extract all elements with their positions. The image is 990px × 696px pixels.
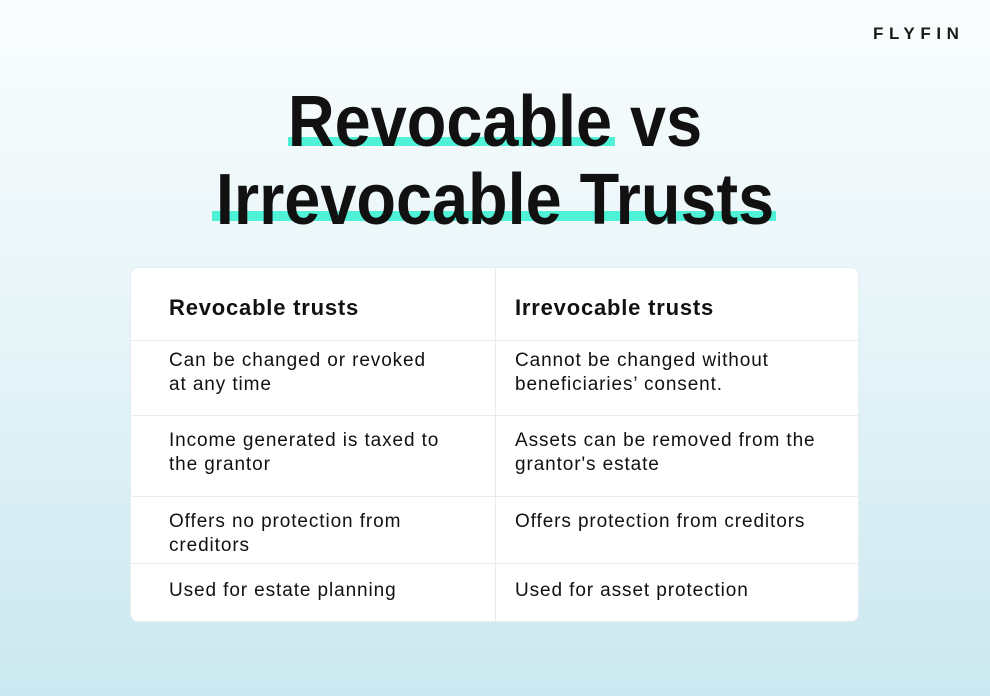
text: revocable row 2: the grantor — [169, 454, 271, 475]
panel: comparison table — [130, 267, 859, 622]
text: revocable row 2 — [169, 430, 439, 475]
title line 2: Irrevocable Trusts — [216, 160, 774, 240]
title line 1: Revocable vs — [288, 82, 702, 162]
text: revocable row 4: Used for estate planning — [169, 580, 397, 601]
row 3 — [131, 497, 858, 564]
header row — [131, 268, 858, 341]
text: irrevocable row 2: Assets can be removed from the — [515, 430, 816, 451]
text: irrevocable row 1 — [515, 350, 769, 395]
text: revocable row 1: Can be changed or revoked — [169, 350, 426, 371]
row 4 — [169, 580, 749, 601]
text: irrevocable row 3: Offers protection from creditors — [515, 511, 805, 532]
text: irrevocable row 2 — [515, 430, 816, 475]
highlight: line 2 — [212, 211, 776, 221]
row 2 — [131, 416, 858, 497]
highlight: line 1 — [288, 137, 615, 146]
text: revocable row 3 — [169, 511, 401, 556]
text: irrevocable row 1: Cannot be changed without — [515, 350, 769, 371]
text: irrevocable row 2: grantor's estate — [515, 454, 660, 475]
heading: irrevocable: Irrevocable trusts — [515, 295, 714, 320]
title — [216, 82, 774, 240]
text: revocable row 1 — [169, 350, 426, 395]
text: revocable row 2: Income generated is taxed to — [169, 430, 439, 451]
text: revocable row 1: at any time — [169, 374, 272, 395]
row 1 — [131, 341, 858, 416]
text: irrevocable row 4: Used for asset protection — [515, 580, 749, 601]
text: irrevocable row 1: beneficiaries’ consent. — [515, 374, 723, 395]
text: revocable row 3: Offers no protection from — [169, 511, 401, 532]
logo: FLYFIN — [873, 24, 965, 43]
text: revocable row 3: creditors — [169, 535, 250, 556]
heading: revocable: Revocable trusts — [169, 295, 359, 320]
